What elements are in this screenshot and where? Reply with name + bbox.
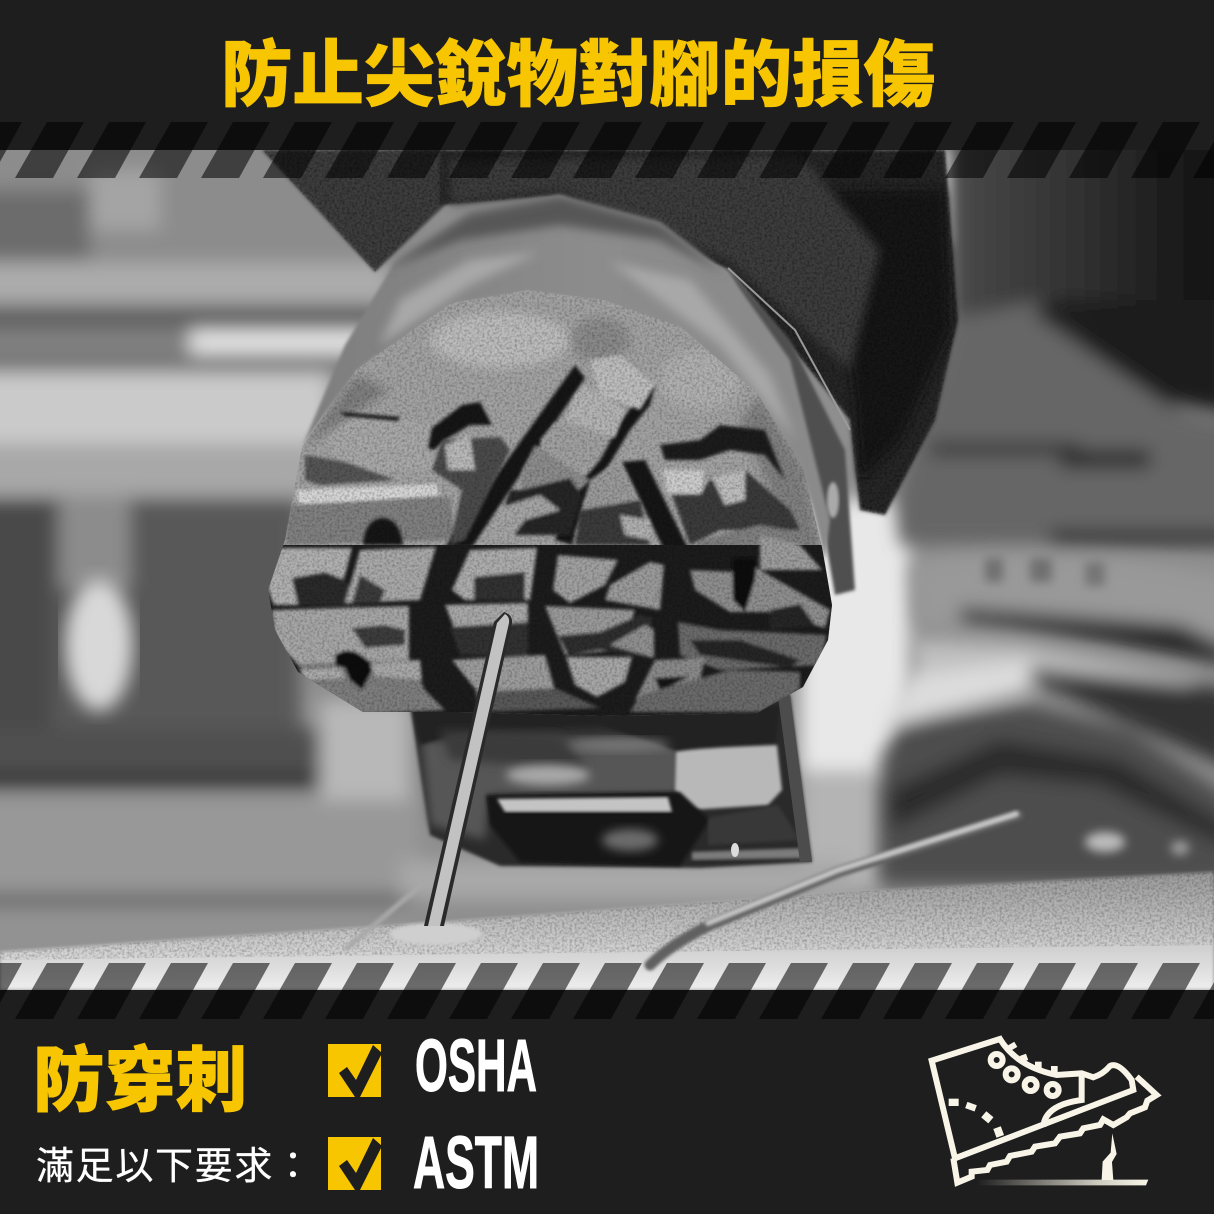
icon: boot stepping on nail bbox=[932, 1039, 1157, 1185]
tread row band bbox=[262, 545, 842, 720]
dirt grain on sole bbox=[260, 285, 850, 720]
boot sole with tread bbox=[260, 285, 850, 720]
heel block bbox=[410, 695, 812, 868]
dark grooves bbox=[340, 365, 690, 552]
subtitle: puncture resistant: 防穿刺 bbox=[33, 1042, 247, 1121]
label: OSHA: OSHA bbox=[415, 1024, 537, 1107]
second bent nail bbox=[650, 815, 1018, 965]
nail in the sole bbox=[345, 612, 512, 950]
checkbox: OSHA bbox=[328, 1044, 382, 1097]
footer band bbox=[0, 990, 1214, 1214]
title: 防止尖銳物對腳的損傷 bbox=[221, 36, 935, 116]
checkbox: ASTM bbox=[328, 1137, 382, 1190]
center lugs bbox=[432, 355, 655, 545]
background leg bbox=[880, 130, 1214, 885]
top hazard stripes bbox=[0, 122, 1214, 178]
bottom hazard stripes bbox=[0, 963, 1214, 1019]
photo: boot stepping on a nail bbox=[0, 130, 1214, 990]
boot upper toe cap bbox=[302, 195, 830, 560]
left lugs bbox=[330, 418, 357, 438]
ground plank bbox=[0, 870, 1214, 990]
tread lugs rows bbox=[268, 535, 830, 714]
right lugs bbox=[658, 422, 818, 545]
header band bbox=[0, 0, 1214, 150]
text: meets the following requirements: 滿足以下要求： bbox=[36, 1146, 312, 1188]
blurred light blob on the left bbox=[65, 579, 133, 711]
dark trouser leg bbox=[262, 150, 962, 595]
top surface shading bbox=[302, 312, 820, 545]
label: ASTM: ASTM bbox=[413, 1121, 539, 1204]
sole side studs bbox=[827, 482, 839, 518]
